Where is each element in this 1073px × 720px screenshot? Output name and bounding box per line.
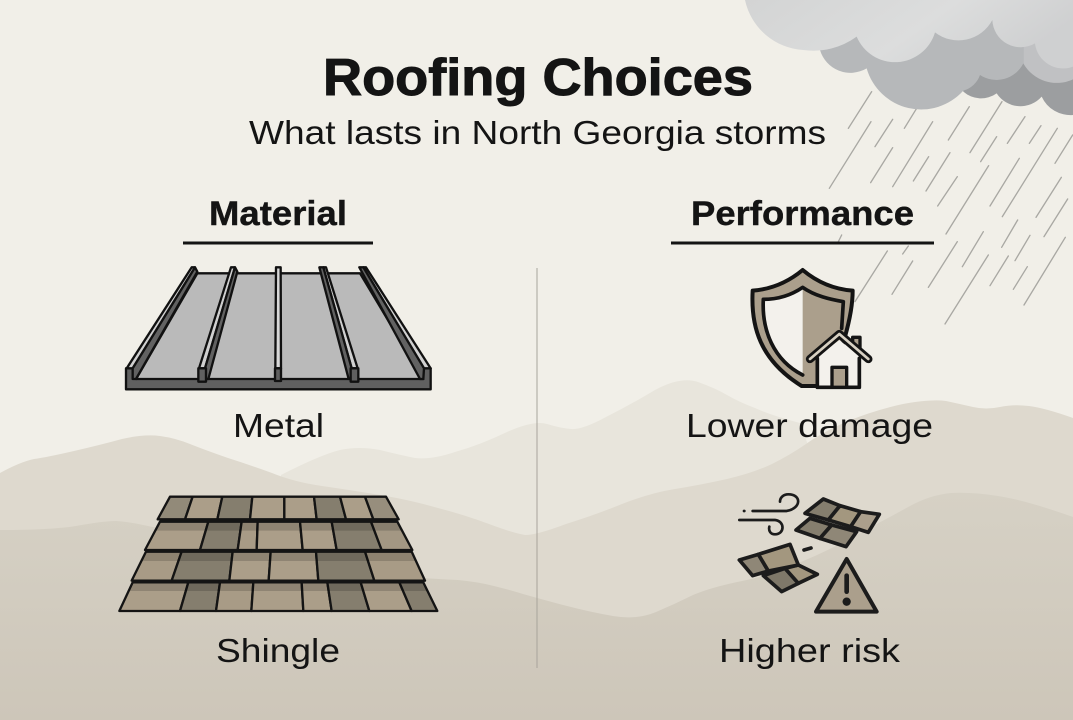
flying shingles lower bbox=[739, 544, 817, 592]
icon: shield with house bbox=[752, 270, 868, 387]
label: Metal: Metal bbox=[233, 407, 324, 444]
column heading: Performance bbox=[671, 195, 934, 244]
label: Lower damage: Lower damage bbox=[686, 407, 933, 444]
wind lines bbox=[739, 494, 798, 534]
column heading: Material: Material bbox=[209, 195, 347, 233]
rain streaks bbox=[829, 92, 1073, 324]
center divider bbox=[536, 268, 538, 668]
icon: metal roof bbox=[126, 267, 431, 389]
title: Roofing Choices bbox=[323, 49, 753, 107]
flying shingles upper bbox=[796, 499, 879, 547]
icon: wind, loose shingles and warning bbox=[739, 494, 879, 612]
storm cloud bbox=[745, 0, 1073, 115]
background: layered mountains bbox=[0, 380, 1073, 720]
column heading: Performance: Performance bbox=[691, 195, 914, 233]
label: Shingle: Shingle bbox=[216, 632, 340, 669]
subtitle: What lasts in North Georgia storms bbox=[249, 114, 826, 151]
warning triangle bbox=[816, 559, 877, 612]
label: Higher risk: Higher risk bbox=[719, 632, 901, 669]
icon: asphalt shingles bbox=[119, 497, 437, 611]
column heading: Material bbox=[183, 195, 373, 244]
